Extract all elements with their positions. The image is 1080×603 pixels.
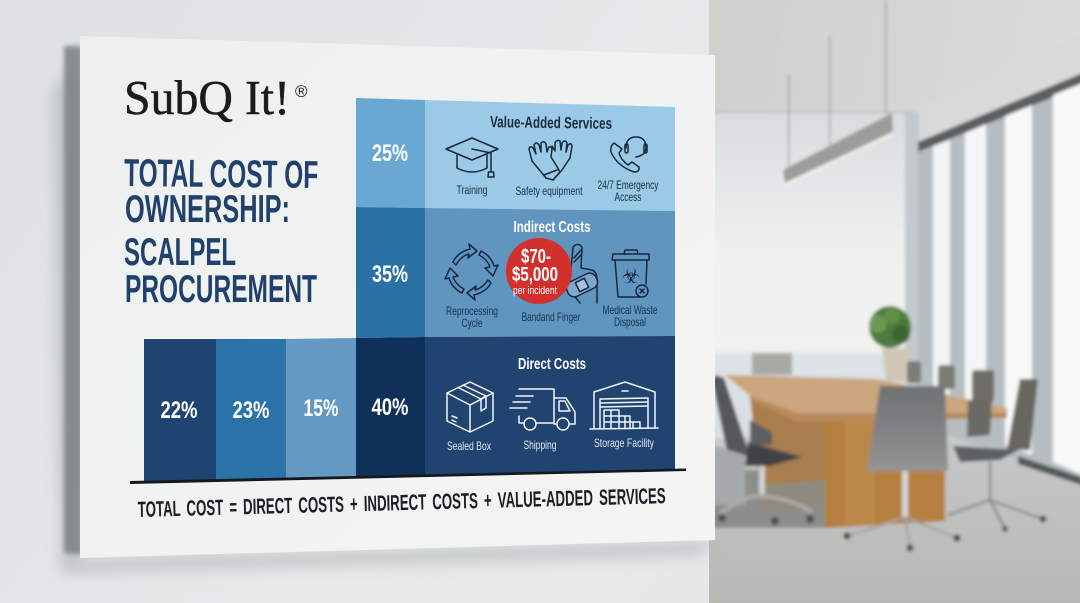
label: storage facility: Storage Facility <box>594 436 654 450</box>
title: TOTAL COST OF <box>124 152 318 197</box>
label: bandand finger: Bandand Finger <box>522 310 580 324</box>
logo: SubQ It!: SubQ It! <box>124 70 290 125</box>
panel: poster board <box>80 36 715 558</box>
icon: emergency phone headset <box>611 137 647 172</box>
panel: direct costs: Direct Costs <box>518 356 586 373</box>
title <box>124 152 318 311</box>
panel: direct costs: 40% <box>372 394 408 421</box>
title: OWNERSHIP: <box>125 188 290 231</box>
logo: SubQ It!: ® <box>295 82 308 101</box>
bar: 15 percent: 15% <box>304 395 338 422</box>
label: training: Training <box>456 183 488 197</box>
label: reprocessing cycle: Reprocessing <box>446 304 498 318</box>
panel: value-added services: Value-Added Services <box>490 114 612 133</box>
callout: cost per incident <box>506 238 572 304</box>
bar: 23 percent: 23% <box>232 397 270 424</box>
background: blurred office conference room <box>700 0 1080 603</box>
poster shadow <box>52 46 715 574</box>
icon: biohazard symbol: ☣ <box>622 264 640 288</box>
callout: cost per incident: $5,000 <box>512 264 558 286</box>
icon: reprocessing cycle <box>445 244 498 300</box>
label: 24/7 emergency access: Access <box>614 190 642 204</box>
title: PROCUREMENT <box>125 268 317 311</box>
formula: total cost equation: TOTAL COST = DIRECT COSTS + INDIRECT COSTS + VALUE-ADDED SERVICES <box>137 483 666 522</box>
panel: direct costs <box>356 336 675 477</box>
icon: storage facility <box>590 382 658 429</box>
label: 24/7 emergency access <box>598 178 658 204</box>
icon: sealed box <box>447 382 493 432</box>
callout: cost per incident: per incident <box>513 285 557 297</box>
icon: bandaged finger <box>564 244 600 303</box>
panel: indirect costs: 35% <box>372 261 408 288</box>
bar: 15 percent <box>286 338 356 479</box>
label: sealed box: Sealed Box <box>447 439 491 453</box>
panel: value-added services: 25% <box>372 140 408 167</box>
label: medical waste disposal <box>602 303 658 329</box>
bar: 23 percent <box>216 339 286 480</box>
label: reprocessing cycle <box>446 304 498 330</box>
title: SCALPEL <box>124 231 236 274</box>
panel: indirect costs: Indirect Costs <box>514 219 591 236</box>
icon: shipping truck <box>510 389 575 430</box>
label: shipping: Shipping <box>524 438 556 452</box>
chart baseline <box>130 468 686 484</box>
chart: stacked cost breakdown <box>144 98 675 481</box>
label: medical waste disposal: Medical Waste <box>602 303 658 317</box>
icon: medical waste bin <box>612 250 649 297</box>
panel: indirect costs <box>356 207 675 338</box>
icon: safety gloves <box>529 140 572 180</box>
icon: graduation cap <box>446 138 498 177</box>
label: 24/7 emergency access: 24/7 Emergency <box>598 178 658 192</box>
label: safety equipment: Safety equipment <box>516 184 583 198</box>
panel: value-added services <box>356 98 675 211</box>
bar: 22 percent <box>144 339 216 481</box>
bar: 22 percent: 22% <box>160 397 198 424</box>
callout: cost per incident: $70- <box>521 246 551 268</box>
label: reprocessing cycle: Cycle <box>462 316 483 330</box>
label: medical waste disposal: Disposal <box>614 315 646 329</box>
